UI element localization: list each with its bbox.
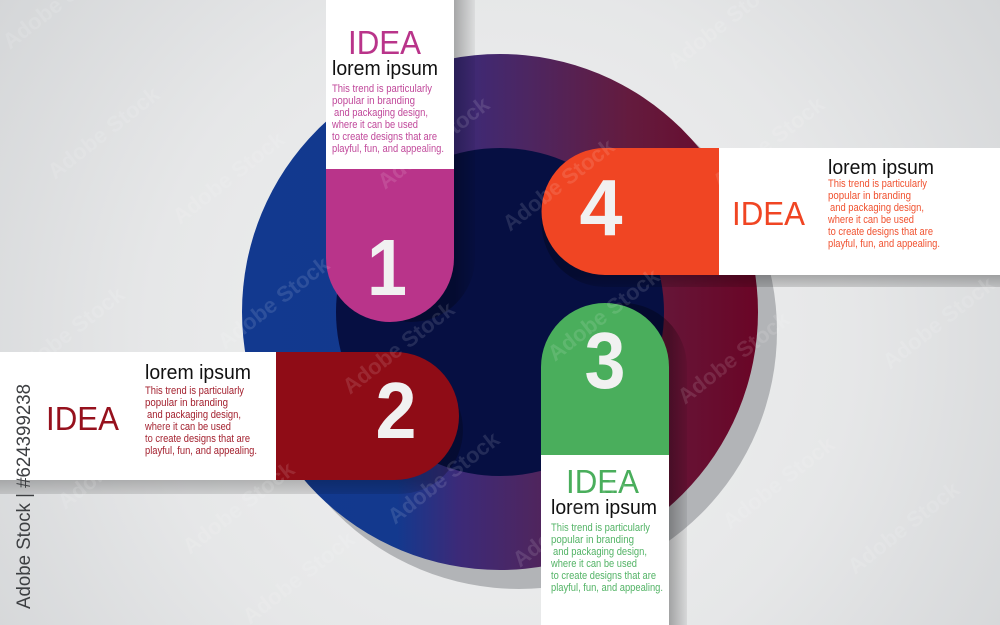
- heading 3: IDEA: [566, 463, 639, 500]
- body text 2: This trend is particularly: [145, 385, 244, 397]
- panel 2: dark red horizontal tab: [0, 352, 459, 480]
- body text 1: This trend is particularly: [332, 83, 432, 95]
- watermark text: Adobe Stock: [8, 281, 130, 384]
- body text 4: [827, 178, 940, 250]
- heading 4: IDEA: [732, 195, 805, 232]
- number 4: 4: [580, 163, 623, 252]
- orange tab 4: [542, 148, 719, 275]
- body text 2: and packaging design,: [147, 409, 241, 421]
- magenta tab 1: [326, 169, 454, 322]
- body text 3: This trend is particularly: [551, 522, 650, 534]
- number 1: 1: [367, 223, 407, 312]
- outer gradient circle: [242, 54, 758, 570]
- circle drop shadow: [261, 73, 777, 589]
- body text 2: where it can be used: [144, 421, 231, 433]
- body text 3: [550, 522, 663, 594]
- white card 4: [718, 148, 1000, 275]
- body text 1: to create designs that are: [332, 131, 437, 143]
- body text 2: [144, 385, 257, 457]
- body text 4: where it can be used: [827, 214, 914, 226]
- white card 2: [0, 352, 277, 480]
- body text 4: and packaging design,: [830, 202, 924, 214]
- watermark text: Adobe Stock: [543, 263, 665, 366]
- white card 1: [326, 0, 454, 170]
- body text 1: [331, 83, 444, 155]
- red tab 2: [276, 352, 459, 480]
- number 3: 3: [584, 316, 626, 405]
- body text 2: to create designs that are: [145, 433, 250, 445]
- body text 2: popular in branding: [145, 397, 228, 409]
- panel 3: green vertical tab: [541, 303, 669, 625]
- body text 4: popular in branding: [828, 190, 911, 202]
- heading 1: IDEA: [348, 24, 421, 61]
- body text 1: popular in branding: [332, 95, 415, 107]
- watermark text: Adobe Stock: [878, 271, 1000, 374]
- green tab 3: [541, 303, 669, 455]
- body text 4: This trend is particularly: [828, 178, 927, 190]
- body text 3: to create designs that are: [551, 570, 656, 582]
- watermark text: Adobe Stock: [708, 91, 830, 194]
- body text 3: and packaging design,: [553, 546, 647, 558]
- watermark text: Adobe Stock: [338, 296, 460, 399]
- watermark text: Adobe Stock: [843, 476, 965, 579]
- white card 3: [541, 454, 669, 625]
- body text 2: playful, fun, and appealing.: [145, 445, 257, 457]
- body text 1: playful, fun, and appealing.: [332, 143, 444, 155]
- body text 4: playful, fun, and appealing.: [828, 238, 940, 250]
- watermark text: Adobe Stock: [178, 456, 300, 559]
- subheading 2: lorem ipsum: [145, 362, 251, 384]
- heading 2: IDEA: [46, 400, 119, 437]
- watermark text: Adobe Stock: [213, 251, 335, 354]
- body text 1: where it can be used: [331, 119, 418, 131]
- subheading 3: lorem ipsum: [551, 497, 657, 519]
- watermark text: Adobe Stock: [43, 81, 165, 184]
- watermark text: Adobe Stock: [373, 91, 495, 194]
- body text 4: to create designs that are: [828, 226, 933, 238]
- watermark text: Adobe Stock: [718, 431, 840, 534]
- subheading 1: lorem ipsum: [332, 58, 438, 80]
- subheading 4: lorem ipsum: [828, 157, 934, 179]
- watermark text: Adobe Stock: [508, 469, 630, 572]
- watermark text: Adobe Stock: [673, 306, 795, 409]
- inner navy circle: [336, 148, 664, 476]
- watermark text: Adobe Stock: [53, 411, 175, 514]
- stock id side label: Adobe Stock | #624399238: [14, 384, 35, 609]
- watermark text: Adobe Stock: [168, 126, 290, 229]
- body text 3: popular in branding: [551, 534, 634, 546]
- body text 3: where it can be used: [550, 558, 637, 570]
- watermark text: Adobe Stock: [383, 426, 505, 529]
- number 2: 2: [376, 366, 416, 455]
- panel 1: magenta vertical tab: [326, 0, 454, 322]
- body text 3: playful, fun, and appealing.: [551, 582, 663, 594]
- panel 4: orange horizontal tab: [542, 148, 1000, 275]
- body text 1: and packaging design,: [334, 107, 428, 119]
- watermark text: Adobe Stock: [498, 133, 620, 236]
